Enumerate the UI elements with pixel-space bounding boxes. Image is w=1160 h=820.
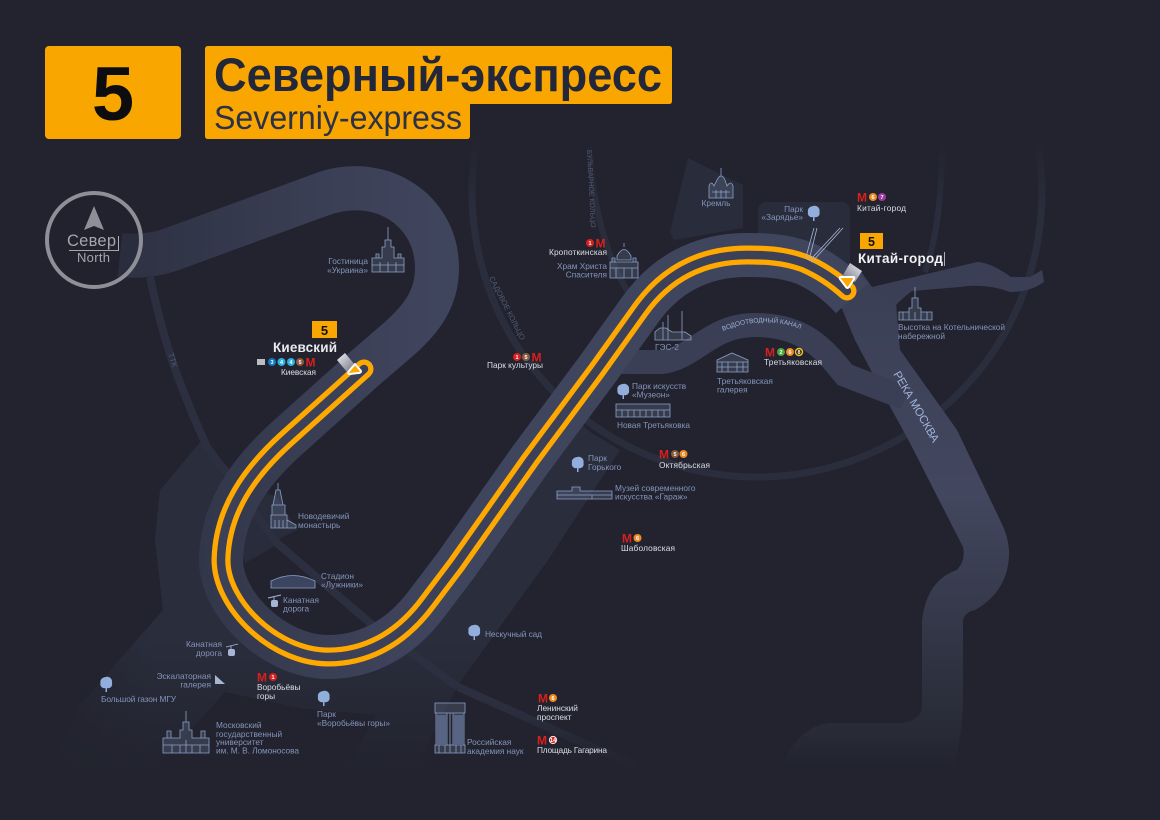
landmark: Kotelnicheskaya tower: [898, 287, 1005, 341]
icon: railway: [257, 359, 265, 365]
landmark: Tretyakov Gallery: галерея: [717, 384, 748, 394]
metro: Vorobyovy Gory: горы: [257, 691, 275, 701]
metro: Kievskaya: 5: [298, 360, 302, 366]
stop: Kievsky: 5: [321, 323, 328, 338]
landmark: escalator gallery: галерея: [180, 680, 211, 690]
landmark: park Muzeon: «Музеон»: [632, 390, 670, 400]
landmark: Kremlin: [702, 168, 733, 208]
metro: Kievskaya: Киевская: [281, 367, 316, 377]
metro: Kievskaya: 4: [280, 360, 284, 366]
metro: Shabolovskaya: М: [622, 532, 632, 546]
stop: Kitay-gorod: 5: [868, 235, 875, 249]
metro: Oktyabrskaya: Октябрьская: [659, 460, 710, 470]
landmark: Academy of Sciences: Российская: [467, 737, 511, 747]
metro: Ploshchad Gagarina: [537, 734, 607, 755]
landmark: cable car, west: Канатная: [186, 639, 222, 649]
metro: Kievskaya: [257, 356, 316, 377]
river: lower reach: [780, 270, 1009, 768]
metro: Shabolovskaya: 6: [636, 536, 639, 542]
metro: Shabolovskaya: Шаболовская: [621, 543, 675, 553]
landmark: park Zaryadye: «Зарядье»: [761, 212, 803, 222]
landmark: cable car, east: [268, 595, 319, 614]
metro: Shabolovskaya: [621, 532, 675, 553]
metro: Kitay-gorod: М: [857, 190, 867, 204]
stop pointer: [843, 263, 862, 282]
landmark: MSU: университет: [216, 737, 264, 747]
landmark: Academy of Sciences: академия наук: [467, 746, 524, 756]
metro: Tretyakovskaya: 6: [788, 350, 792, 356]
landmark: GES-2: [655, 311, 691, 352]
compass: north: Север: [67, 232, 116, 250]
landmark: Kremlin: Кремль: [702, 198, 730, 208]
landmark: Tretyakov Gallery: [717, 353, 773, 394]
landmark: cable car, east: дорога: [283, 604, 310, 614]
landmark: Novodevichy: монастырь: [298, 520, 340, 530]
river: branch east: [872, 262, 1044, 305]
landmark: Tretyakov Gallery: Третьяковская: [717, 376, 773, 386]
track: excursion route double line: [221, 255, 847, 657]
landmark: escalator gallery: [157, 671, 225, 690]
header: route title: [205, 46, 672, 139]
header: route title: Severniy-express: [214, 99, 462, 136]
metro: Kievskaya: 4: [289, 360, 293, 366]
landmark: big lawn MSU: Большой газон МГУ: [101, 694, 177, 704]
metro: Kievskaya: М: [306, 356, 316, 370]
landmark: MSU: Московский: [216, 720, 262, 730]
road labels: ТТК: [166, 352, 179, 369]
metro: Vorobyovy Gory: М: [257, 670, 267, 684]
landmark: New Tretyakov: Новая Третьяковка: [617, 420, 690, 430]
landmark: Christ the Saviour: Спасителя: [566, 270, 607, 280]
landmark: Gorky park: Горького: [588, 462, 622, 472]
landmark: Garage museum: искусства «Гараж»: [615, 492, 688, 502]
landmark: park Zaryadye: [761, 204, 843, 262]
metro: Kievskaya: 3: [270, 360, 274, 366]
landmark: park Muzeon: [617, 381, 687, 400]
metro: Kropotkinskaya: М: [596, 236, 606, 250]
icon: Zaryadye bridge: [806, 228, 843, 262]
metro: Oktyabrskaya: 6: [682, 452, 685, 458]
road labels: [166, 150, 596, 369]
metro: Park Kultury: 5: [524, 355, 528, 361]
metro: Oktyabrskaya: 5: [673, 452, 677, 458]
landmark: MSU: им. М. В. Ломоносова: [216, 746, 299, 756]
landmark: park Zaryadye: Парк: [784, 204, 803, 214]
stop badge: [860, 233, 883, 249]
metro: Oktyabrskaya: [659, 448, 710, 470]
stop: Kievsky: [273, 321, 361, 374]
metro: Kitay-gorod: Китай-город: [857, 203, 906, 213]
landmark: Luzhniki: Стадион: [321, 571, 354, 581]
landmark: park Vorobyovy Gory: Парк: [317, 709, 336, 719]
landmark: Christ the Saviour: Храм Христа: [557, 261, 607, 271]
city districts background: [40, 158, 850, 780]
landmark: hotel Ukraina: [327, 227, 404, 275]
metro: Kropotkinskaya: Кропоткинская: [549, 247, 607, 257]
landmark: Kotelnicheskaya tower: набережной: [898, 331, 945, 341]
ring roads: [150, 0, 1042, 767]
landmark: Academy of Sciences: [435, 703, 524, 756]
stop badge: [312, 321, 337, 338]
landmark: Garage museum: Музей современного: [615, 483, 696, 493]
metro: Tretyakovskaya: [764, 346, 822, 367]
road labels: САДОВОЕ КОЛЬЦО: [487, 275, 527, 342]
landmark: park Vorobyovy Gory: [317, 691, 390, 728]
landmark: Christ the Saviour: [557, 243, 638, 280]
stop name: Китай-город: [858, 251, 943, 266]
compass: north: North: [77, 250, 110, 265]
landmark: Luzhniki: [271, 571, 363, 590]
river label: Reka Moskva: РЕКА МОСКВА: [890, 370, 941, 445]
metro: Park Kultury: Парк культуры: [487, 360, 543, 370]
landmark: Gorky park: Парк: [588, 453, 607, 463]
metro: Leninsky Prospekt: [537, 692, 578, 722]
stop: Kitay-gorod: [840, 233, 944, 288]
header: route title: Северный-экспресс: [214, 48, 662, 101]
metro: Leninsky Prospekt: М: [538, 692, 548, 706]
landmark: MSU: [163, 711, 299, 756]
metro: Kitay-gorod: 6: [871, 195, 875, 201]
landmark: Luzhniki: «Лужники»: [321, 580, 363, 590]
landmark: Gorky park: [572, 453, 622, 472]
landmark: Kotelnicheskaya tower: Высотка на Котельнической: [898, 322, 1005, 332]
landmark: MSU: государственный: [216, 729, 283, 739]
metro: Kropotkinskaya: 1: [588, 241, 592, 247]
landmark: hotel Ukraina: «Украина»: [327, 265, 368, 275]
stop pointer: [337, 353, 355, 372]
landmark: park Muzeon: Парк искусств: [632, 381, 687, 391]
metro: Kitay-gorod: [857, 190, 906, 213]
landmark: cable car, east: Канатная: [283, 595, 319, 605]
metro: Oktyabrskaya: М: [659, 448, 669, 462]
metro: Tretyakovskaya: Третьяковская: [764, 357, 822, 367]
landmark: Novodevichy: [271, 483, 350, 530]
landmark: hotel Ukraina: Гостиница: [328, 256, 368, 266]
landmark: escalator gallery: Эскалаторная: [157, 671, 211, 681]
header: route number badge: 5: [92, 52, 134, 137]
metro: Leninsky Prospekt: проспект: [537, 712, 572, 722]
stop name: Киевский: [273, 340, 337, 355]
landmark: park Vorobyovy Gory: «Воробьёвы горы»: [317, 718, 390, 728]
icon: tree: [808, 206, 820, 221]
metro: Ploshchad Gagarina: Площадь Гагарина: [537, 745, 607, 755]
metro: Leninsky Prospekt: Ленинский: [537, 703, 578, 713]
landmark: big lawn MSU: [100, 677, 177, 704]
metro: Tretyakovskaya: М: [765, 346, 775, 360]
metro: Tretyakovskaya: 2: [779, 350, 783, 356]
landmark: GES-2: ГЭС-2: [655, 342, 679, 352]
road labels: БУЛЬВАРНОЕ КОЛЬЦО: [585, 150, 596, 228]
landmark: Garage museum: [557, 483, 696, 502]
landmark: Novodevichy: Новодевичий: [298, 511, 350, 521]
river: Moskva: [120, 188, 1044, 768]
metro: Vorobyovy Gory: Воробьёвы: [257, 682, 300, 692]
metro: Tretyakovskaya: 8: [797, 350, 801, 356]
metro: Park Kultury: М: [532, 350, 542, 364]
landmark: cable car, west: дорога: [196, 648, 222, 658]
landmark: cable car, west: [186, 639, 238, 658]
compass: north: [47, 193, 141, 287]
header: route number badge: [45, 46, 181, 139]
metro: Kitay-gorod: 7: [880, 195, 884, 201]
river: vodootvodny canal: [615, 325, 905, 398]
metro: Ploshchad Gagarina: М: [537, 734, 547, 748]
metro: Vorobyovy Gory: 1: [271, 675, 275, 681]
metro: Ploshchad Gagarina: 14: [550, 738, 557, 744]
metro: Kropotkinskaya: [549, 236, 607, 257]
landmark: Neskuchny garden: Нескучный сад: [485, 629, 542, 639]
metro: Leninsky Prospekt: 6: [551, 696, 555, 702]
metro: Park Kultury: [487, 350, 543, 370]
canal label: ВОДООТВОДНЫЙ КАНАЛ: [722, 316, 802, 331]
landmark: New Tretyakov: [616, 404, 690, 430]
metro: Vorobyovy Gory: [257, 670, 300, 701]
river: main band: [120, 188, 852, 657]
landmark: Neskuchny garden: [468, 625, 542, 640]
metro: Park Kultury: 1: [515, 355, 519, 361]
